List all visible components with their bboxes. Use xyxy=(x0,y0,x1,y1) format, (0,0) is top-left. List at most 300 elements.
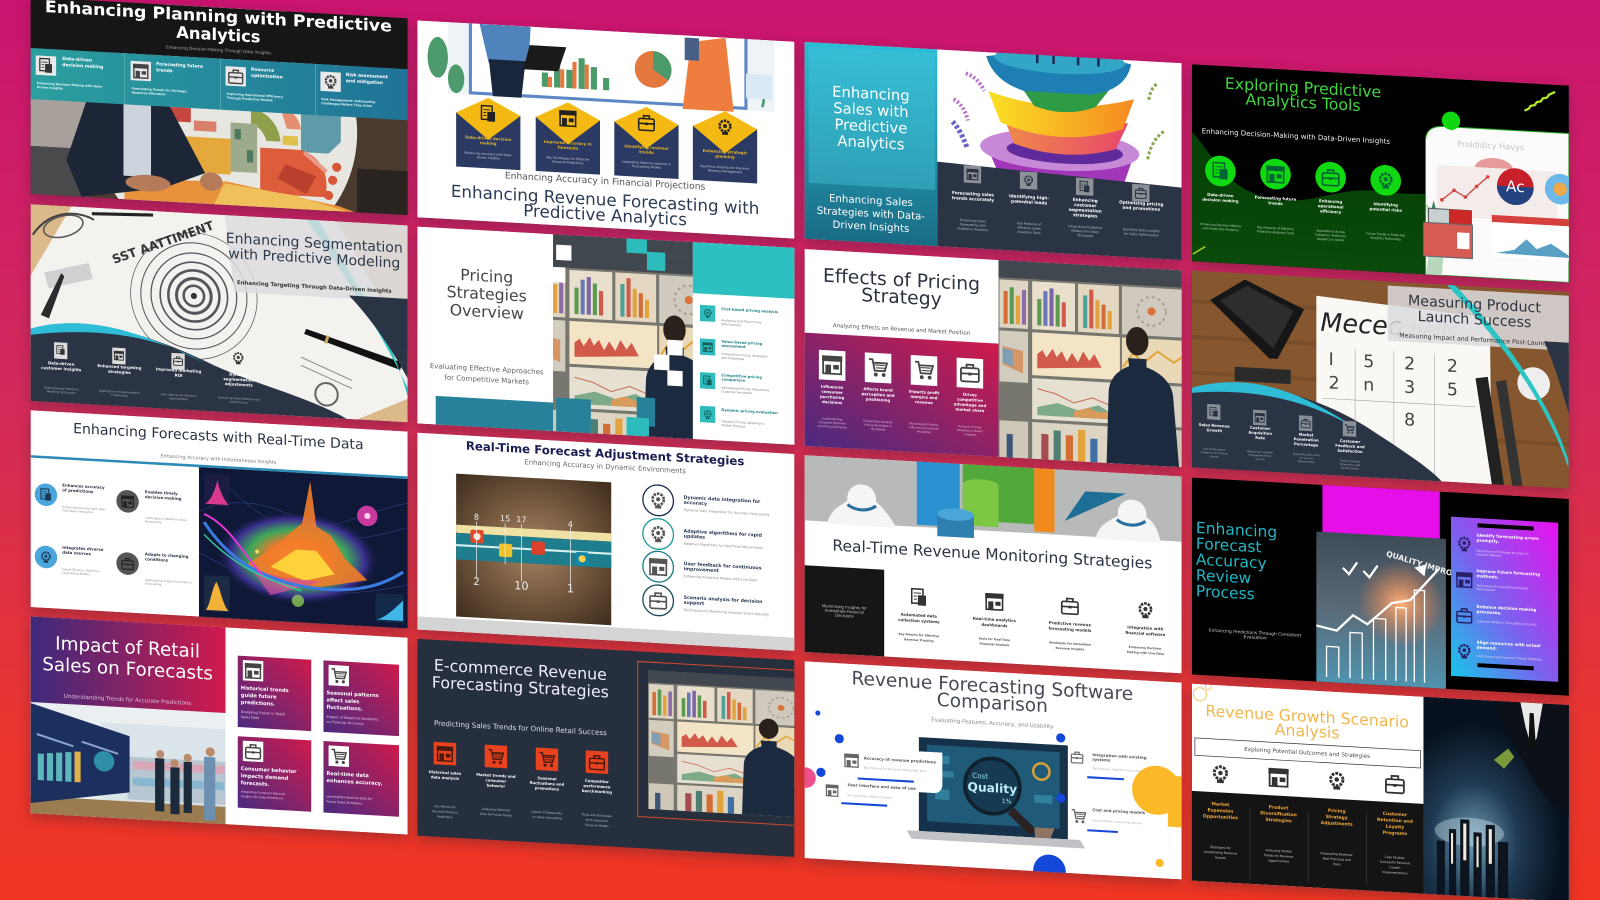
card: identifying revenue trends: Forecasting Models xyxy=(632,164,661,170)
slide: Enhancing Sales with Predictive Analytics xyxy=(805,33,1182,260)
panel: dark feature area: Understanding Predictive xyxy=(44,386,79,391)
item descriptions: Future Trends in Real-Time xyxy=(62,567,100,573)
illustration: laptop with Quality magnifier: Cost xyxy=(972,771,988,781)
icons xyxy=(912,589,1151,619)
slide: Impact of Retail Sales on Forecasts xyxy=(31,616,408,835)
title: Analytics xyxy=(837,133,904,154)
subtitle box: Exploring Potential Outcomes and Strategies xyxy=(1244,747,1370,760)
panel: dark feature band: Identifying high- xyxy=(1009,194,1049,202)
card: identifying revenue trends: Integrating Machine Learning in xyxy=(622,160,671,166)
callout: interface xyxy=(816,767,916,808)
right dark edge xyxy=(1544,341,1569,414)
panel: gradient features: Drives xyxy=(963,392,977,397)
labels: Historical sales xyxy=(429,770,461,776)
panel: pricing items: and Challenges xyxy=(721,356,745,361)
teal curve stripe xyxy=(306,220,408,399)
panel: dark feature area: Effectiveness xyxy=(1298,459,1315,464)
panel: dark feature area: Customer xyxy=(1250,426,1270,431)
subtitle: Driven Insights xyxy=(833,220,909,235)
panel: gradient action list xyxy=(1451,517,1558,682)
card: historical trends: Historical trends xyxy=(241,685,289,694)
item descriptions: Time Data Integration xyxy=(61,508,94,514)
panel: dark feature area: Launch xyxy=(1210,454,1219,459)
panel: dark feature area: Segmentation xyxy=(169,396,188,401)
labels: Competitor xyxy=(585,779,609,784)
labels: financial software xyxy=(1125,630,1166,637)
illustration: laptop with Quality magnifier xyxy=(907,736,1085,849)
panel: dark feature area: Applications of Segmentation xyxy=(99,389,140,395)
panel: gradient action list: Identify forecasting errors xyxy=(1477,532,1539,541)
panel: gradient action list: Importance of Forecast Accuracy in xyxy=(1477,549,1529,556)
panel: gradient features: Consumer Behavior xyxy=(819,420,847,426)
panel: pricing items xyxy=(693,242,795,445)
panel: dark feature area: for Launch xyxy=(1299,456,1313,460)
photo: businessman with city xyxy=(1423,697,1569,900)
panel: black scenarios: Pricing xyxy=(1328,809,1346,815)
panel: gradient features: Dynamic Pricing: xyxy=(958,424,981,429)
descriptions xyxy=(432,804,612,828)
card: identifying revenue trends: trends xyxy=(639,149,654,155)
subtitle box xyxy=(1195,738,1420,768)
panel: dark feature area: in Marketing xyxy=(111,393,128,398)
slide: Pricing Strategies Overview xyxy=(417,227,795,460)
panel: dark feature area: Tracking Market xyxy=(1340,459,1360,464)
panel: dark feature area: Launch xyxy=(1256,457,1265,461)
panel: dark feature area: Feedback and xyxy=(1335,444,1365,449)
panel: pricing items: Dynamic pricing evaluation xyxy=(721,408,778,415)
item descriptions: Dynamic Data Integration for Accurate Forecasting xyxy=(684,508,769,517)
descriptions xyxy=(1200,222,1405,242)
panel: teal feature strip: Resource Allocation xyxy=(132,90,166,96)
panel: grey title xyxy=(1388,286,1569,351)
panel: dark feature area: Percentage xyxy=(1294,442,1319,448)
panel: teal feature strip: Challenges Before They Arise xyxy=(321,101,372,108)
panel: black side: Immediate Financial xyxy=(825,608,864,615)
illustration: laptop with Quality magnifier: Quality xyxy=(968,780,1017,797)
panel: dark feature band: Optimizing pricing xyxy=(1119,200,1163,208)
illustration: desk with tablet and paper: 3 xyxy=(1404,378,1415,398)
panel: teal feature strip: trends xyxy=(156,67,173,74)
card: real-time data: Leveraging Historical Data for xyxy=(327,794,372,801)
subtitle: Enhancing Accuracy in Financial Projections xyxy=(505,170,706,193)
card: real-time data: enhances accuracy. xyxy=(327,778,382,787)
panel: dark feature area: Indicators for Product xyxy=(1201,450,1228,456)
item descriptions: Enhancing Predictive Models with Live Data xyxy=(684,574,757,582)
descriptions: Making with Live Data xyxy=(1127,650,1164,656)
descriptions: Financial Analysis xyxy=(979,642,1010,647)
labels: collection systems xyxy=(898,617,940,624)
labels xyxy=(1202,192,1402,214)
title second line: Analytics xyxy=(176,23,260,47)
card: improved accuracy xyxy=(536,101,600,175)
photo: analyst at chart wall xyxy=(536,233,719,456)
item descriptions: Enhancing Accuracy with Real- xyxy=(62,505,106,511)
panel: black side: Decisions xyxy=(835,613,854,619)
panel: black scenarios: Opportunities xyxy=(1268,858,1289,864)
card: data-driven decision making: Enhancing Accuracy with Data- xyxy=(464,151,512,157)
panel: teal feature strip: Risk assessment xyxy=(346,73,388,80)
magenta block xyxy=(1322,485,1440,548)
panel: gradient features: Pricing Strategies in xyxy=(864,423,892,428)
title: Revenue Forecasting Software xyxy=(851,668,1133,705)
panel: gradient action list: Enhance decision-making xyxy=(1477,604,1536,612)
panel: teal feature strip: Improving Operational Efficiency xyxy=(227,92,283,99)
panel: black scenarios: Trends for Revenue xyxy=(1263,853,1293,859)
panel: pricing items: Dynamic Pricing: Adapting to xyxy=(721,419,764,426)
title: Overview xyxy=(450,300,524,323)
panel: grey title xyxy=(224,215,408,302)
title: Accuracy xyxy=(1196,551,1267,573)
labels: forecasting models xyxy=(1048,626,1092,633)
card: consumer behavior: Consumer behavior xyxy=(241,766,297,775)
illustration: desk with tablet and paper: 2 xyxy=(1329,373,1340,394)
card: data-driven decision making: Driven Insights xyxy=(477,155,500,161)
panel: dark feature area: Growth xyxy=(1207,428,1222,433)
panel: gradient action list: Align resources with actual xyxy=(1477,640,1541,648)
illustration: desk with tablet and paper: I xyxy=(1329,350,1334,370)
subtitle: Evaluating Effective Approaches xyxy=(430,361,544,376)
panel: dark feature band: Real-time Data Insights xyxy=(1123,227,1160,233)
panel: dark feature area: Penetration xyxy=(1294,437,1319,443)
descriptions: with Predictive Analytics xyxy=(1202,226,1239,232)
illustration: paper with spiral sketch: SST AATTIMENT xyxy=(110,218,216,267)
card: seasonal patterns: on Forecast Accuracy xyxy=(327,720,364,726)
title: Real-Time Revenue Monitoring Strategies xyxy=(832,537,1152,573)
pixel blocks xyxy=(553,234,683,438)
labels: Data-driven xyxy=(1207,192,1234,198)
labels: fluctuations and xyxy=(530,781,565,787)
title: Sales on Forecasts xyxy=(42,654,213,685)
panel: gradient features: Understanding xyxy=(822,416,842,421)
item descriptions: Forecasting Models xyxy=(62,571,90,576)
descriptions: on Sales Forecasting xyxy=(532,815,562,820)
panel: gradient features: Influencing Customer xyxy=(909,425,940,431)
panel: pricing items: Analyzing Cost-Plus Pricing xyxy=(721,318,761,325)
card: real-time data: Real-time data xyxy=(327,771,369,779)
illustration: desk with tablet and paper xyxy=(1192,277,1569,489)
icon row xyxy=(1205,155,1401,197)
panel: product mockup card: Ac xyxy=(1506,177,1525,196)
slide: E-commerce Revenue Forecasting Strategies xyxy=(417,639,808,858)
panel: teal feature strip: decision making xyxy=(62,62,103,70)
panel: black scenarios: Programs xyxy=(1383,830,1407,837)
title second line: Predictive Analytics xyxy=(523,200,687,229)
slide: Revenue Forecasting Software Comparison xyxy=(795,661,1182,895)
panel: dark feature band: trends accurately xyxy=(952,195,994,204)
panel: teal feature strip: Resource xyxy=(251,68,274,74)
subtitle: Enhancing Decision-Making with Data-Driven Insights xyxy=(1202,126,1390,146)
slide: Enhancing Forecast Accuracy Review Process xyxy=(1192,478,1569,696)
card: enhancing strategic planning: Real-Time Analytics for Dynamic xyxy=(700,164,750,171)
descriptions: Tools for Real-Time xyxy=(979,636,1010,642)
panel: dark feature band: Key Features of xyxy=(1017,221,1041,227)
panel: gradient features: Influences xyxy=(821,384,843,390)
item labels: Enhances accuracy xyxy=(62,482,105,490)
panel: black scenarios: Growth xyxy=(1215,855,1226,860)
decorative rings xyxy=(1193,683,1211,702)
dark corner xyxy=(349,296,408,378)
slide: Measuring Product Launch Success xyxy=(1192,270,1569,489)
item labels: User feedback for continuous xyxy=(684,562,762,571)
card: enhancing strategic planning: planning xyxy=(715,153,735,160)
descriptions: Tools and Techniques xyxy=(582,812,612,818)
panel: gradient features: Psychological Pricing: xyxy=(909,421,939,427)
item descriptions xyxy=(61,505,192,588)
panel: dark feature area: Rate xyxy=(1255,436,1266,440)
panel: dark feature area xyxy=(1192,380,1442,481)
title: Forecasting Strategies xyxy=(432,673,609,702)
photo: retail store team xyxy=(31,702,226,824)
card: consumer behavior: Integrating Consumer Behavior xyxy=(241,789,285,796)
labels: decision making xyxy=(1202,197,1239,204)
blue rule xyxy=(31,455,408,479)
item labels: accuracy xyxy=(684,500,707,507)
card: seasonal patterns: affect sales xyxy=(327,697,359,705)
squiggle accent xyxy=(1524,90,1555,112)
blobs xyxy=(795,709,1182,895)
panel: dark feature band: Forecasting with xyxy=(960,222,986,228)
subtitle: Enhancing Targeting Through Data-Driven Insights xyxy=(237,280,392,295)
panel: black scenarios: Loyalty xyxy=(1386,824,1404,831)
panel: teal feature strip: optimization xyxy=(251,73,283,81)
title: Impact of Retail xyxy=(55,633,200,663)
panel: black scenarios: Successful Revenue xyxy=(1380,860,1410,865)
card: data-driven decision making xyxy=(456,96,520,170)
photo: timeline on wood xyxy=(456,474,611,625)
title: Analysis xyxy=(1275,720,1339,742)
panel: dark feature area: Key Performance xyxy=(1204,448,1225,452)
panel: dark feature area: Modeling Techniques xyxy=(47,389,76,395)
panel: pricing items: Value-based pricing xyxy=(721,340,762,346)
subtitle: Evaluating Features, Accuracy, and Usability xyxy=(931,717,1054,730)
title: Process xyxy=(1196,582,1255,603)
icon glyphs xyxy=(437,746,604,770)
illustration: layered funnel xyxy=(950,52,1165,182)
item labels: improvement xyxy=(684,566,720,574)
item labels: conditions xyxy=(145,556,169,563)
panel: dark feature area: Sales Revenue xyxy=(1199,423,1230,429)
labels: trends xyxy=(1268,200,1283,206)
card: improved accuracy: forecasts xyxy=(557,145,579,151)
card: consumer behavior: forecasts. xyxy=(241,780,269,788)
panel: dark feature area: Satisfaction xyxy=(1337,449,1363,454)
item descriptions: Applications of Real-Time Data in xyxy=(145,578,192,585)
descriptions: Revenue Models xyxy=(585,823,609,828)
panel: gradient features: Perception xyxy=(917,429,931,434)
photo: timeline on wood: 2 xyxy=(473,577,480,588)
panel: gradient features: Adapting to Market xyxy=(957,428,984,433)
item labels: Scenario analysis for decision xyxy=(684,596,762,605)
photo: timeline on wood: 8 xyxy=(474,512,479,522)
subtitle: Enhancing Accuracy in Dynamic Environments xyxy=(524,458,686,475)
panel: pricing items: Value-Based Pricing: Maximizing xyxy=(721,386,769,392)
photo: timeline on wood: 15 xyxy=(500,513,510,524)
panel: black scenarios: Forecasting Revenue: xyxy=(1320,851,1353,857)
red photo frame xyxy=(638,661,794,825)
panel: gradient action list: Improve future forecasting xyxy=(1477,568,1540,577)
labels: promotions xyxy=(535,786,560,792)
panel: gradient action list: demand. xyxy=(1477,645,1497,651)
panel: dark feature area: Enhanced targeting xyxy=(97,363,141,371)
descriptions: Future Trends in Predictive xyxy=(1366,231,1405,238)
panel: dark feature band: segmentation xyxy=(1069,207,1102,215)
panel: gradient action list: Performance xyxy=(1477,587,1495,592)
panel: gradient action list: processes. xyxy=(1477,609,1502,615)
panel: dark feature area: Market xyxy=(1299,433,1314,437)
panel: teal feature strip: Through Predictive Models xyxy=(227,96,273,102)
labels: potential risks xyxy=(1370,206,1403,213)
card: seasonal patterns: fluctuations. xyxy=(327,705,363,713)
panel: dark feature band: Predictive Analytics xyxy=(958,226,989,232)
panel: dark feature band: Integrating Predictive xyxy=(1068,224,1102,230)
item descriptions xyxy=(683,508,769,617)
card: seasonal patterns xyxy=(323,660,399,736)
panel: black scenarios: Strategies for xyxy=(1210,845,1231,850)
slide: Revenue Growth Scenario Analysis xyxy=(1192,683,1569,900)
panel: gradient features: positioning xyxy=(866,396,891,403)
descriptions: Key Metrics for Effective xyxy=(898,632,939,638)
panel: black scenarios: Adjustments xyxy=(1321,820,1353,828)
panel: pricing items: Competitive pricing xyxy=(721,373,762,380)
panel: gradient action list: Decision Making xyxy=(1477,552,1501,558)
descriptions: Revenue Insights xyxy=(1056,646,1085,652)
labels: Automated data xyxy=(901,612,937,619)
title: Forecast xyxy=(1196,535,1262,556)
item labels: decision-making xyxy=(145,494,182,501)
panel: dark feature area: segmentation xyxy=(223,376,254,383)
panel: gradient features: purchasing xyxy=(820,394,844,400)
callout: integration: systems xyxy=(1092,757,1111,763)
photo: planner at colourful plate xyxy=(30,0,408,216)
descriptions: Industries: Predictive xyxy=(1315,233,1346,238)
callout: cost: Pricing Models: Comparing Options xyxy=(1092,818,1143,825)
panel: pricing items: Competitive Pricing: Strategies xyxy=(721,352,767,359)
descriptions: Analytics Technology xyxy=(1370,236,1401,241)
labels: performance xyxy=(583,784,611,789)
teal block xyxy=(436,396,556,431)
callout: integration xyxy=(1056,733,1147,782)
panel: gradient features: market share xyxy=(955,407,985,413)
callout: integration: Top Features: Usability and Quality xyxy=(1091,766,1142,773)
illustration: desk with tablet and paper: Mecec xyxy=(1320,308,1402,342)
descriptions: Predictions xyxy=(437,814,453,819)
item labels: updates xyxy=(684,533,705,541)
panel: gradient features: margins and xyxy=(910,394,938,400)
callout: accuracy: Accuracy of revenue predictions xyxy=(864,755,937,765)
slide: Exploring Predictive Analytics Tools xyxy=(1192,64,1576,283)
title: Enhancing Segmentation xyxy=(226,231,403,257)
card: consumer behavior: impacts demand xyxy=(241,773,289,782)
descriptions: Enhancing Decision- xyxy=(1129,645,1162,651)
descriptions: Predictive Analytics Tools xyxy=(1257,229,1295,235)
subtitle: Measuring Impact and Performance Post-Launch xyxy=(1399,332,1550,348)
illustration: desk with tablet and paper: 5 xyxy=(1447,380,1458,401)
item labels xyxy=(684,495,762,610)
panel: gradient action list: Common Pitfalls in Forecasting Accuracy xyxy=(1477,619,1537,627)
slide: Enhancing Forecasts with Real-Time Data xyxy=(31,410,408,629)
panel: dark feature band: Strategies xyxy=(1077,233,1094,238)
card: consumer behavior: Insights into Sales Predictions xyxy=(241,794,284,801)
panel: dark feature area: Penetration and xyxy=(1340,462,1361,467)
card: historical trends: predictions. xyxy=(241,700,275,708)
panel: dark feature area: Dynamic xyxy=(229,372,248,378)
item labels xyxy=(62,482,189,564)
panel: black scenarios: Tools xyxy=(1332,862,1341,867)
illustration: desk with tablet and paper: 5 xyxy=(1363,352,1374,372)
panel: gradient features: competitive xyxy=(957,396,983,403)
subtitle: Analyzing Effects on Revenue and Market Position xyxy=(833,323,971,337)
labels: operational xyxy=(1318,203,1344,210)
title: Effects of Pricing xyxy=(823,266,980,296)
chart: rainbow data landscape xyxy=(199,467,408,629)
card: identifying revenue trends xyxy=(614,105,679,179)
labels: behavior xyxy=(487,784,505,789)
panel: pricing items: Cost-based pricing analysis xyxy=(721,307,778,314)
title: Exploring Predictive xyxy=(1225,74,1381,101)
icons xyxy=(1214,765,1404,793)
descriptions: Data for Future Trends xyxy=(480,812,512,818)
card: improved accuracy: Improved accuracy in xyxy=(544,139,592,147)
panel: pricing items: assessment xyxy=(721,344,746,349)
card: improved accuracy: Key Techniques for Effective xyxy=(546,155,589,162)
item labels: Enables timely xyxy=(145,489,178,496)
panel: dark feature band: Models into Sales xyxy=(1071,229,1099,234)
panel: dark feature band: strategies xyxy=(1073,212,1098,220)
panel: dark feature area: Measuring Customer xyxy=(1247,450,1273,455)
panel: dark feature band xyxy=(937,162,1182,260)
panel: black scenarios: Product xyxy=(1269,805,1288,812)
card: identifying revenue trends: Identifying revenue xyxy=(624,143,668,151)
panel: black scenarios: Accelerating Revenue xyxy=(1204,850,1237,856)
panel: gradient features: and Pricing Decisions xyxy=(817,424,847,430)
card: enhancing strategic planning: Enhancing strategic xyxy=(703,148,747,155)
panel: dark feature band: and promotions xyxy=(1122,205,1161,213)
card: improved accuracy: Revenue Predictions xyxy=(552,160,584,165)
photo: quality improvement chart: QUALITY IMPROV xyxy=(1385,549,1459,580)
panel: gradient features: Impacts profit xyxy=(909,389,939,395)
panel: black side xyxy=(805,565,884,657)
subtitle: Enhancing Sales xyxy=(829,193,913,209)
card: data-driven decision making: making xyxy=(480,140,497,146)
panel: dark feature band: Analytics Tools xyxy=(1018,230,1041,235)
card: seasonal patterns: Impact of Seasonal Variations xyxy=(327,715,378,722)
illustration: laptop with Quality magnifier: 1% xyxy=(1002,798,1012,806)
panel: teal feature strip xyxy=(31,48,408,120)
panel: pricing items: comparison xyxy=(721,377,746,383)
panel: gradient features: revenue xyxy=(915,399,933,405)
panel: black scenarios xyxy=(1192,791,1423,894)
icons xyxy=(434,742,608,774)
panel: black scenarios: Case Studies: xyxy=(1385,855,1405,860)
callout: accuracy xyxy=(830,734,942,793)
subtitle: Understanding Trends for Accurate Predictions xyxy=(64,694,191,707)
panel: pricing items: Market Changes xyxy=(721,423,746,429)
title: Predictive xyxy=(834,116,907,137)
panel: black scenarios: Expansion xyxy=(1207,807,1233,815)
item descriptions: Forecasting xyxy=(145,519,162,524)
panel: black scenarios: Diversification xyxy=(1260,810,1297,818)
panel: dark feature band: potential leads xyxy=(1011,198,1048,207)
item descriptions: Techniques for Minimizing Forecast Errors Instantly xyxy=(683,608,769,617)
panel: dark feature area xyxy=(31,321,347,419)
subtitle: Strategies with Data- xyxy=(817,206,925,223)
subtitle: Enhancing Accuracy with Instantaneous Insights xyxy=(161,453,277,466)
illustration: desk with tablet and paper: cchells xyxy=(1388,316,1458,344)
subtitle: Enhancing Decision-Making Through Data Insights xyxy=(166,44,271,55)
card: real-time data: Future Sales Strategies xyxy=(327,799,362,805)
subtitle: Evaluation xyxy=(1244,634,1267,641)
title: Enhancing xyxy=(1196,519,1277,541)
